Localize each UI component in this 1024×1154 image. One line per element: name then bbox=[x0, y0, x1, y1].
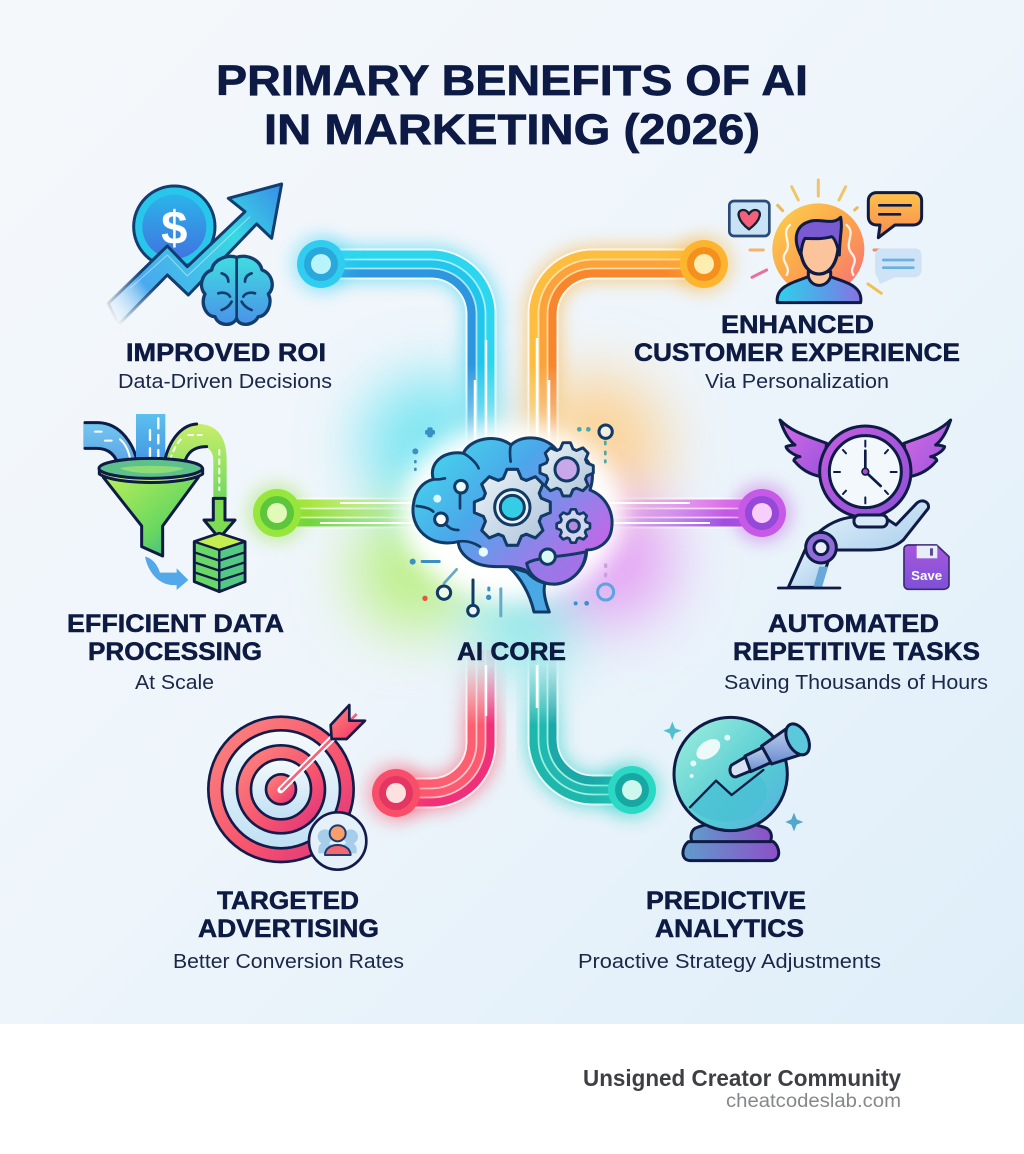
clock ticks and hands bbox=[834, 441, 897, 503]
footer credit: cheatcodeslab.com bbox=[726, 1091, 901, 1112]
footer band bbox=[0, 1024, 1024, 1154]
funnel body bbox=[103, 477, 198, 556]
clock bbox=[820, 426, 911, 517]
connector: purple to Automated Repetitive Tasks bbox=[600, 483, 792, 543]
stand upper tier bbox=[691, 822, 771, 843]
data stack bbox=[194, 533, 245, 592]
label: Targeted Advertising bbox=[173, 887, 404, 973]
coin bbox=[134, 186, 215, 267]
glass highlights bbox=[693, 735, 724, 764]
icon: data funnel and storage stack bbox=[83, 414, 245, 592]
label: Automated Repetitive Tasks bbox=[724, 610, 988, 694]
dollar sign: $ bbox=[161, 202, 187, 255]
icon: target with arrow and audience bbox=[208, 705, 366, 870]
icon: AI core brain with gears bbox=[410, 425, 614, 617]
head bbox=[800, 234, 838, 274]
white glow behind brain bbox=[400, 424, 624, 600]
stand lower tier bbox=[683, 842, 779, 861]
large gear bbox=[474, 469, 550, 545]
elbow joint bbox=[806, 532, 836, 563]
audience badge bbox=[309, 812, 366, 870]
robot forearm bbox=[788, 550, 832, 587]
label: Automated Repetitive Tasks: AUTOMATED bbox=[768, 610, 939, 638]
label: Enhanced Customer Experience: Via Personalization bbox=[705, 371, 889, 393]
footer credit bbox=[583, 1065, 901, 1112]
connector: orange to Enhanced Customer Experience bbox=[534, 234, 734, 460]
label: Targeted Advertising: ADVERTISING bbox=[198, 915, 379, 943]
label: Predictive Analytics: Proactive Strategy Adjustments bbox=[578, 951, 881, 973]
title bbox=[216, 57, 808, 154]
funnel rim bbox=[99, 468, 203, 482]
hair bbox=[796, 217, 841, 255]
label: Automated Repetitive Tasks: Saving Thousands of Hours bbox=[724, 672, 988, 694]
mini brain bbox=[202, 256, 272, 324]
label: Improved ROI: IMPROVED ROI bbox=[126, 339, 326, 367]
circuit details bbox=[410, 427, 607, 617]
brain stem bbox=[508, 567, 549, 612]
label: Automated Repetitive Tasks: REPETITIVE TASKS bbox=[733, 638, 980, 666]
pale chat bubble bbox=[875, 248, 922, 284]
rising arrow bbox=[108, 184, 282, 325]
nodes bbox=[455, 480, 467, 493]
brain folds bbox=[417, 445, 511, 547]
save disk bbox=[904, 545, 949, 589]
label: Efficient Data Processing bbox=[67, 610, 284, 694]
label: Improved ROI: Data-Driven Decisions bbox=[118, 371, 332, 393]
heart badge bbox=[729, 201, 769, 236]
right wing bbox=[904, 420, 951, 477]
telescope bbox=[730, 757, 751, 777]
icon: winged clock and robot hand bbox=[778, 420, 951, 589]
neck collar bbox=[808, 272, 831, 285]
target rings bbox=[208, 717, 354, 862]
icon: customer with heart and chat bubbles bbox=[729, 180, 922, 303]
glowing sun halo bbox=[772, 203, 864, 295]
connector: green to Efficient Data Processing bbox=[247, 483, 430, 543]
save label: Save bbox=[911, 568, 942, 583]
shirt bbox=[777, 277, 861, 303]
label: Improved ROI bbox=[118, 339, 332, 393]
rays bbox=[750, 180, 888, 293]
label: Predictive Analytics: ANALYTICS bbox=[655, 915, 804, 943]
chart line bbox=[690, 774, 767, 822]
sparkles bbox=[663, 722, 682, 740]
central rainbow glow bbox=[353, 375, 675, 675]
down arrow bbox=[204, 498, 235, 538]
curved blue arrow bbox=[145, 557, 188, 590]
label: Efficient Data Processing: PROCESSING bbox=[88, 638, 262, 666]
icon: improved ROI coin, arrow and brain bbox=[108, 184, 282, 325]
label: Predictive Analytics: PREDICTIVE bbox=[646, 887, 806, 915]
label: Enhanced Customer Experience bbox=[634, 311, 960, 393]
upper gear bbox=[540, 443, 593, 496]
left wing bbox=[780, 420, 827, 477]
green stream bbox=[163, 424, 227, 500]
icon: crystal ball with telescope bbox=[663, 717, 814, 861]
footer credit: Unsigned Creator Community bbox=[583, 1065, 901, 1091]
title: IN MARKETING (2026) bbox=[264, 106, 760, 154]
arrow fletching bbox=[331, 705, 365, 739]
arrow shaft bbox=[281, 734, 337, 790]
thumb bbox=[854, 515, 887, 527]
label: Efficient Data Processing: EFFICIENT DATA bbox=[67, 610, 284, 638]
label: AI Core: AI CORE bbox=[457, 638, 566, 666]
connector: red to Targeted Advertising bbox=[366, 650, 490, 823]
robot hand bbox=[819, 501, 929, 550]
label: Targeted Advertising: Better Conversion Rates bbox=[173, 951, 404, 973]
label: Enhanced Customer Experience: ENHANCED bbox=[721, 311, 874, 339]
brain body bbox=[413, 438, 612, 584]
blue data streams bbox=[83, 423, 140, 468]
label: Efficient Data Processing: At Scale bbox=[135, 672, 214, 694]
connector: blue to Improved ROI bbox=[291, 234, 490, 460]
connector: teal to Predictive Analytics bbox=[534, 650, 662, 820]
title: PRIMARY BENEFITS OF AI bbox=[216, 57, 808, 105]
label: Enhanced Customer Experience: CUSTOMER EXPERIENCE bbox=[634, 339, 960, 367]
small gear bbox=[557, 509, 590, 543]
brain lower lobe bbox=[527, 552, 586, 584]
label: Predictive Analytics bbox=[578, 887, 881, 973]
orange chat bubble bbox=[868, 193, 922, 238]
glass ball bbox=[674, 717, 787, 831]
label: Targeted Advertising: TARGETED bbox=[217, 887, 359, 915]
